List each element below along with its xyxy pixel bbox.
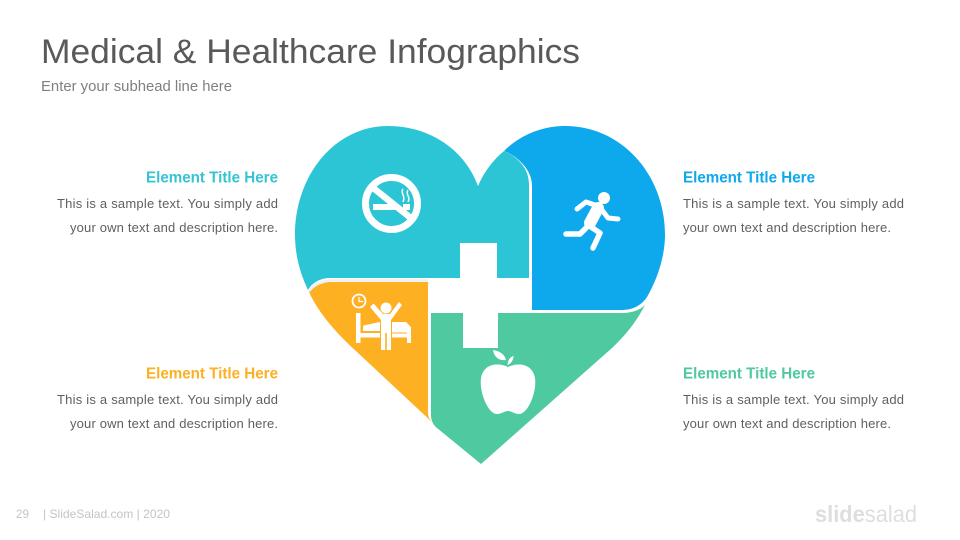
- icon: apple: [481, 350, 535, 414]
- text block: bottom right: your own text and description here.: [683, 416, 891, 431]
- subhead: Enter your subhead line here: [41, 78, 232, 95]
- page number: 29: [16, 507, 29, 521]
- panel: blue heart piece: [504, 126, 665, 310]
- text block: bottom left: [57, 366, 278, 431]
- text block: bottom right: This is a sample text. You simply add: [683, 392, 904, 407]
- text block: top right: This is a sample text. You simply add: [683, 196, 904, 211]
- text block: top left: This is a sample text. You simply add: [57, 196, 278, 211]
- heart diagram: [295, 126, 665, 464]
- text block: bottom left: Element Title Here: [146, 366, 278, 382]
- text block: top right: Element Title Here: [683, 170, 815, 186]
- icon: wake up in bed: [352, 294, 411, 350]
- text block: bottom right: [683, 366, 904, 431]
- panel: green heart piece: [431, 305, 645, 464]
- text block: bottom left: your own text and description here.: [70, 416, 278, 431]
- text block: bottom left: This is a sample text. You simply add: [57, 392, 278, 407]
- text block: top left: [57, 170, 278, 235]
- logo: slidesalad: [815, 501, 917, 527]
- text block: top right: your own text and description here.: [683, 220, 891, 235]
- text block: top right: [683, 170, 904, 235]
- text block: bottom right: Element Title Here: [683, 366, 815, 382]
- title: Medical & Healthcare Infographics: [41, 33, 580, 71]
- panel: orange heart piece: [309, 282, 433, 423]
- panel: teal heart piece: [295, 126, 529, 290]
- text block: top left: Element Title Here: [146, 170, 278, 186]
- divider highlight under teal: [309, 280, 428, 291]
- icon: no smoking: [366, 178, 418, 230]
- text block: top left: your own text and description here.: [70, 220, 278, 235]
- footer text: | SlideSalad.com | 2020: [43, 507, 170, 521]
- icon: runner: [566, 192, 618, 248]
